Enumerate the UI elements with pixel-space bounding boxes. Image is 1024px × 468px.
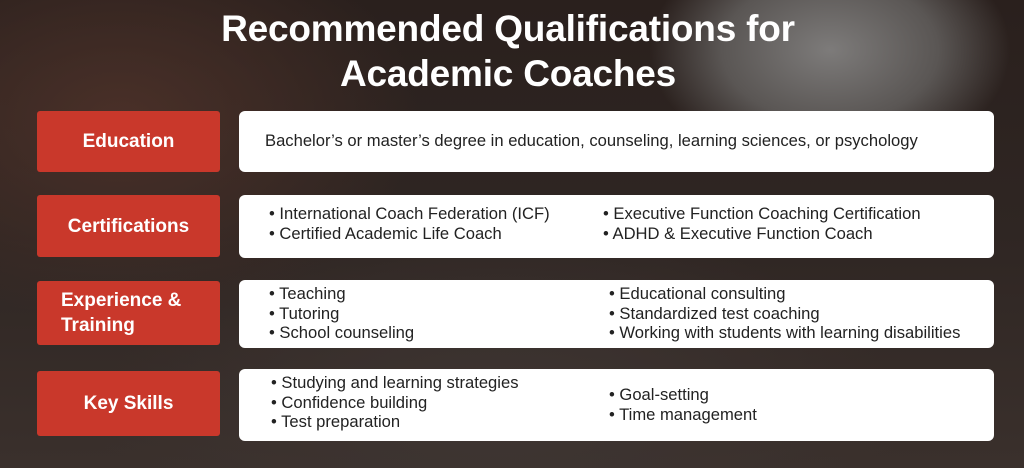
title [221,8,795,94]
panel: key skills: • Test preparation [271,412,400,431]
label: Education: Education [83,131,174,152]
label: Key Skills [37,371,220,436]
panel: education [239,111,994,172]
panel: experience: • School counseling [269,323,414,342]
panel: experience: • Tutoring [269,304,339,322]
title: Recommended Qualifications for [221,8,795,49]
label: Certifications [37,195,220,257]
panel: experience: • Standardized test coaching [609,304,820,322]
panel: certifications: • International Coach Federation (ICF) [269,204,550,223]
panel: certifications: • Executive Function Coaching Certification [603,204,921,223]
panel: key skills: • Goal-setting [609,385,709,404]
panel: experience [239,280,994,348]
panel: certifications: • ADHD & Executive Function Coach [603,224,873,242]
label: Experience & Training: Experience & [61,290,181,311]
label: Experience & Training: Training [61,315,135,336]
panel: key skills: • Confidence building [271,392,427,412]
panel: key skills: • Time management [609,404,757,424]
panel: education: Bachelor’s or master’s degree in education, counseling, learning sciences, or psychology [265,131,918,150]
label: Education [37,111,220,172]
panel: experience: • Working with students with learning disabilities [609,323,960,342]
panel: certifications [239,195,994,258]
panel: certifications: • Certified Academic Life Coach [269,224,502,242]
panel: key skills: • Studying and learning strategies [271,373,518,392]
panel: experience: • Educational consulting [609,284,785,303]
label: Experience & Training [37,281,220,345]
label: Key Skills: Key Skills [84,393,173,414]
label: Certifications: Certifications [68,216,189,236]
panel: key skills [239,369,994,441]
title: Academic Coaches [340,53,676,94]
panel: experience: • Teaching [269,284,346,303]
